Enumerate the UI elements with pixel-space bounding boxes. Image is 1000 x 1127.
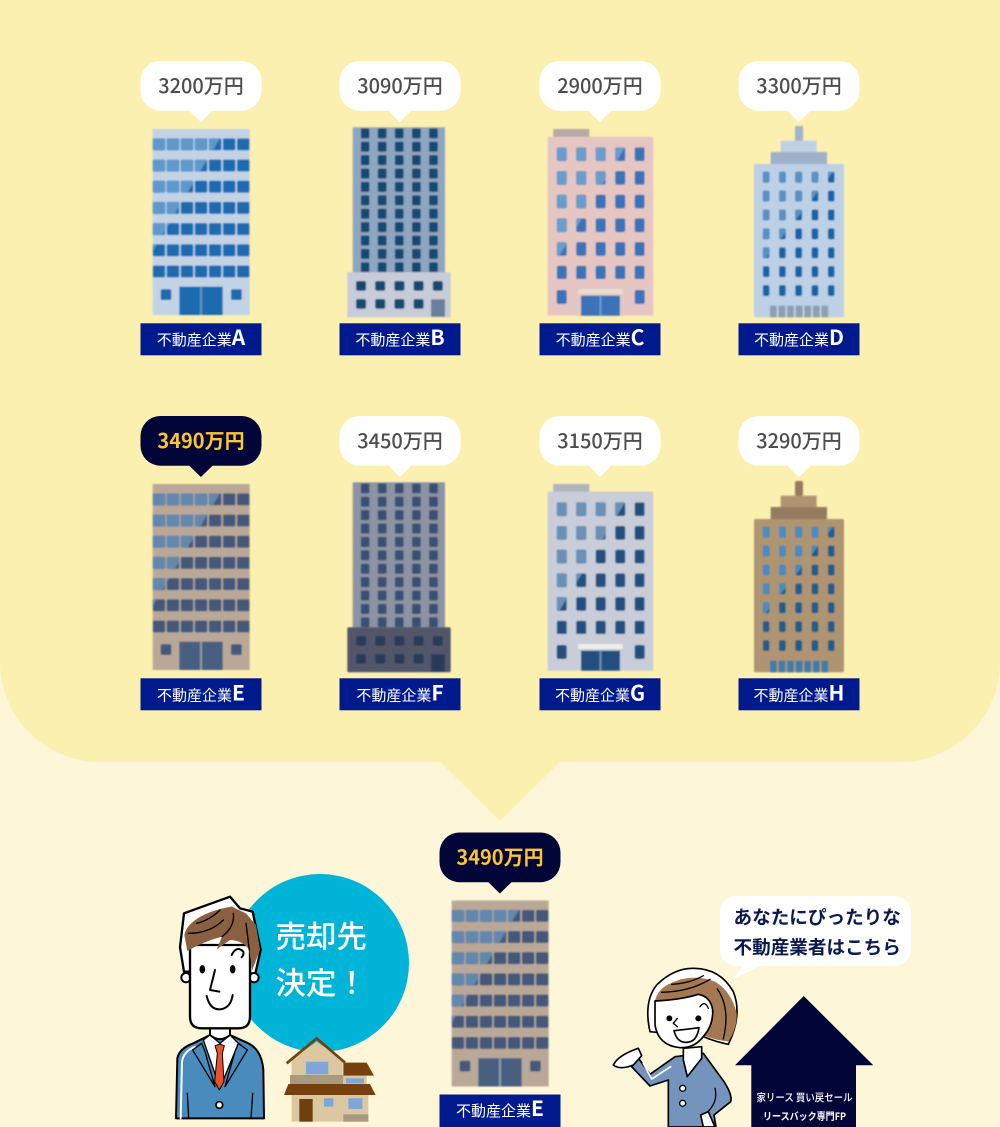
building F [347,482,451,672]
building H [752,481,844,672]
speech bubble: recommendation: 不動産業者はこちら [734,933,901,960]
price bubble G: 3150万円 [557,425,643,454]
selected company E [440,832,560,1127]
label A: 不動産企業A [157,322,246,352]
company G [540,416,660,710]
label E: 不動産企業E [157,678,245,708]
price bubble E: 3490万円 [157,425,245,454]
price bubble selected [440,832,560,894]
label F: 不動産企業F [356,678,444,708]
price bubble C: 2900万円 [557,70,643,99]
label C [540,322,660,355]
label H: 不動産企業H [754,678,844,708]
label selected: 不動産企業E [456,1093,544,1123]
price bubble C [540,61,660,122]
building A [150,129,250,315]
company H [738,416,860,710]
label D [738,322,860,355]
price bubble F: 3450万円 [357,425,443,454]
company F [340,416,460,710]
label D: 不動産企業D [754,322,844,352]
link: house-shaped button [735,996,873,1127]
company C [540,61,660,355]
building C [547,129,653,316]
price bubble H: 3290万円 [756,425,842,454]
company B [340,61,460,355]
speech bubble: recommendation [720,896,911,979]
building G [547,484,653,671]
illustration: businessman [176,897,264,1118]
illustration: woman advisor [613,968,737,1127]
price bubble E [140,416,262,477]
icon: house [284,1038,376,1122]
price bubble A: 3200万円 [158,70,244,99]
building selected [449,900,549,1086]
label selected [440,1093,560,1127]
price bubble B [340,61,460,122]
company E (highlighted) [140,416,262,710]
label E [140,678,262,710]
panel: candidate companies speech shape [0,0,1000,821]
label G: 不動産企業G [555,678,645,708]
speech bubble: recommendation: あなたにぴったりな [734,903,901,930]
building B [347,127,451,317]
price bubble D [738,61,860,122]
building D [752,126,844,317]
label F [340,678,460,710]
company A [140,61,262,355]
price bubble D: 3300万円 [756,70,842,99]
price bubble H [738,416,860,477]
label G [540,678,660,710]
label A [140,322,262,355]
price bubble A [140,61,262,122]
callout: sale decided circle [231,874,409,1052]
building E [150,484,250,670]
company D [738,61,860,355]
link: house-shaped button: リースバック専門FP [763,1108,846,1123]
label B [340,322,460,355]
callout: sale decided circle: 売却先 [276,912,367,956]
label H [738,678,860,710]
price bubble G [540,416,660,477]
price bubble F [340,416,460,477]
label C: 不動産企業C [556,322,645,352]
callout: sale decided circle: 決定！ [276,959,367,1003]
price bubble B: 3090万円 [357,70,443,99]
label B: 不動産企業B [355,322,445,352]
link: house-shaped button: 家リース 買い戻セール [756,1090,853,1105]
price bubble selected: 3490万円 [456,842,544,870]
